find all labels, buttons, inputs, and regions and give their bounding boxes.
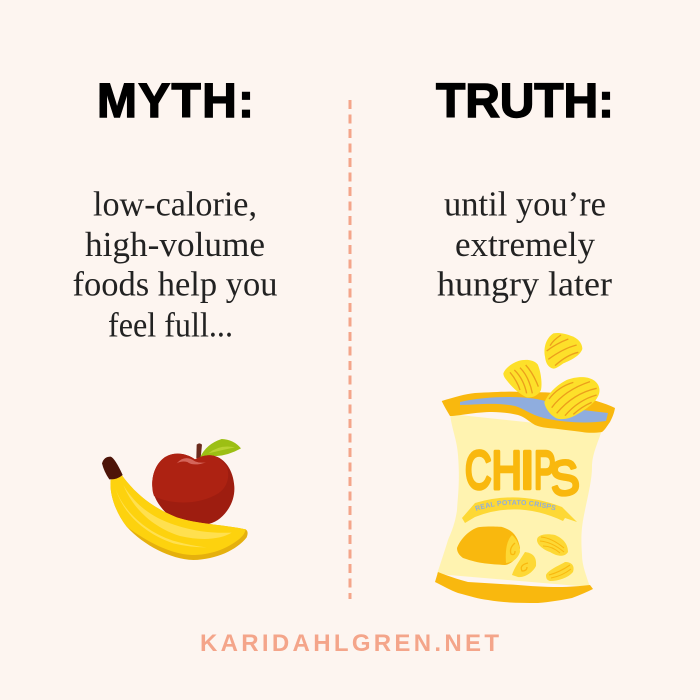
heading: myth: MYTH:: [97, 75, 254, 128]
potato slice face: [506, 535, 520, 563]
chips logo: C: [465, 439, 492, 500]
flying chip top: [544, 333, 582, 369]
bag opening: [460, 397, 608, 422]
chips logo: S: [547, 449, 582, 507]
text block: truth statement: extremely: [455, 225, 595, 264]
text block: myth statement: feel full...: [108, 306, 233, 344]
icon: banana: [102, 457, 248, 560]
divider: dashed line: [348, 100, 352, 599]
flying chip left: [503, 360, 542, 398]
chips logo: H: [492, 441, 522, 501]
bag body: [437, 414, 602, 587]
small chip two: [546, 562, 574, 581]
icon: apple: [152, 439, 241, 525]
chips logo: [465, 439, 582, 507]
heading: truth: TRUTH:: [436, 75, 614, 128]
text block: truth statement: hungry later: [437, 264, 612, 304]
flying chip right: [544, 377, 599, 419]
icon: apple and banana: [102, 439, 248, 560]
footer: website: KARIDAHLGREN.NET: [200, 630, 499, 657]
text block: myth statement: [72, 184, 278, 344]
bag top band: [442, 392, 615, 433]
chips logo: I: [520, 440, 535, 500]
potato slice: [512, 552, 536, 577]
icon: bag of chips: [435, 333, 615, 603]
ribbon: [462, 497, 577, 523]
text block: myth statement: foods help you: [72, 264, 278, 304]
bag bottom band: [435, 572, 593, 603]
chips logo: P: [534, 441, 556, 501]
text block: truth statement: [437, 184, 612, 304]
ribbon tagline: REAL POTATO CRISPS: [475, 500, 556, 511]
text block: myth statement: high-volume: [85, 225, 265, 264]
small chip one: [537, 534, 568, 556]
text block: myth statement: low-calorie,: [93, 184, 257, 224]
potato: [457, 527, 520, 565]
text block: truth statement: until you’re: [444, 184, 606, 224]
